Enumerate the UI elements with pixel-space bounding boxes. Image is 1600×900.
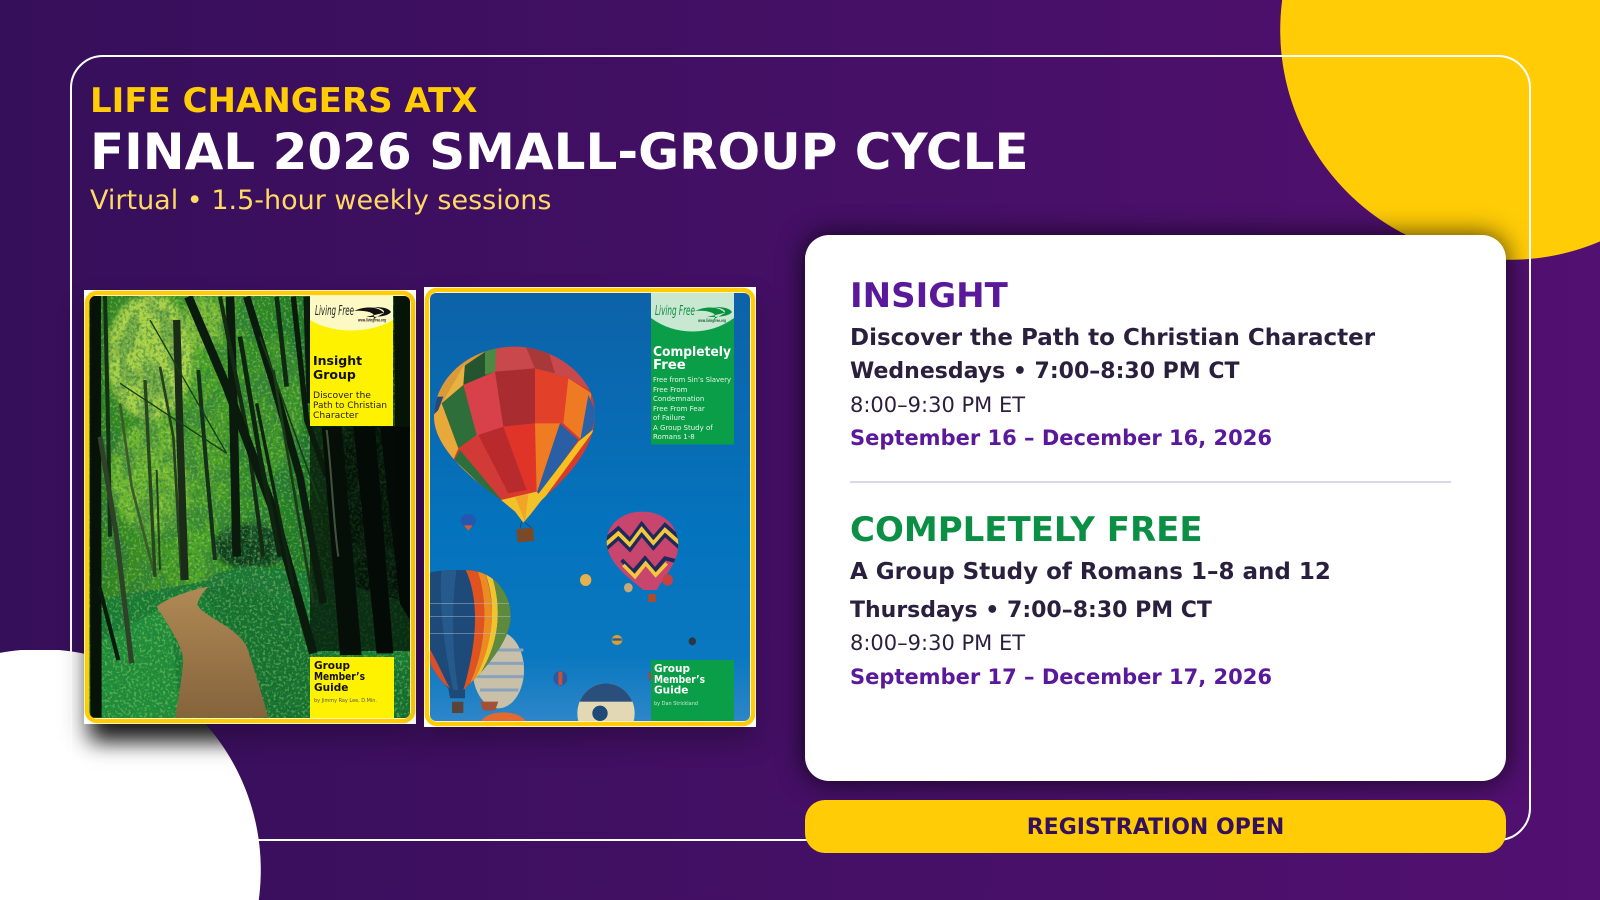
title panel — [310, 296, 393, 426]
section: Insight — [850, 276, 1376, 450]
section: Completely Free — [850, 510, 1331, 689]
tree trunks — [95, 296, 327, 718]
registration button: REGISTRATION OPEN — [1027, 815, 1284, 840]
guide panel: Group — [654, 663, 690, 675]
bottom balloon — [575, 683, 638, 722]
guide panel — [651, 660, 734, 721]
cover subtitle: Romans 1-8 — [653, 433, 695, 441]
header — [90, 81, 1029, 216]
book cover: Insight Group — [84, 290, 416, 724]
guide panel: Guide — [314, 682, 348, 694]
course description: A Group Study of Romans 1–8 and 12 — [850, 558, 1331, 584]
cover title: Insight — [313, 353, 362, 368]
big balloon — [432, 345, 597, 542]
partial balloon — [481, 712, 526, 721]
heading: Completely Free: COMPLETELY FREE — [850, 510, 1203, 550]
striped balloon — [428, 568, 512, 713]
logo: Living Free — [655, 304, 695, 319]
title: FINAL 2026 SMALL-GROUP CYCLE — [90, 123, 1029, 181]
divider — [850, 481, 1451, 483]
decorative circle: yellow top right — [1280, 0, 1600, 260]
dates: September 16 – December 16, 2026 — [850, 426, 1272, 450]
guide panel: Member’s — [654, 674, 705, 686]
guide panel: by Jimmy Ray Lee, D.Min. — [314, 698, 377, 704]
dates: September 17 – December 17, 2026 — [850, 665, 1272, 689]
cover subtitle — [653, 376, 731, 441]
small balloons — [461, 514, 696, 686]
title panel: Free — [653, 358, 686, 373]
cover title: Completely — [653, 345, 731, 360]
balloons photo — [428, 293, 750, 738]
cover subtitle: Discover the — [313, 390, 371, 401]
guide panel — [310, 657, 394, 718]
cover subtitle: Condemnation — [653, 395, 704, 403]
title panel: Path to Christian — [313, 400, 387, 411]
registration button — [805, 800, 1506, 853]
cover subtitle: Free from Sin’s Slavery — [653, 376, 731, 384]
meeting time: Thursdays • 7:00–8:30 PM CT — [850, 598, 1212, 623]
trail — [157, 587, 268, 718]
title panel: Character — [313, 410, 359, 421]
cover subtitle: Free From — [653, 386, 688, 394]
eastern time: 8:00–9:30 PM ET — [850, 393, 1025, 417]
logo: www.livingfree.org — [358, 318, 386, 322]
logo: www.livingfree.org — [698, 318, 726, 323]
guide panel: Group — [314, 660, 350, 672]
guide panel: Guide — [654, 684, 688, 696]
book cover: Completely Free — [424, 287, 756, 727]
title panel: Group — [313, 367, 356, 382]
zigzag balloon — [605, 510, 680, 602]
forest photo — [89, 293, 417, 718]
cover subtitle: Free From Fear — [653, 405, 705, 413]
outline frame — [70, 55, 1531, 841]
meeting time: Wednesdays • 7:00–8:30 PM CT — [850, 359, 1240, 384]
cover subtitle: of Failure — [653, 414, 685, 422]
heading: organisation: LIFE CHANGERS ATX — [90, 81, 478, 121]
subtitle: Virtual • 1.5-hour weekly sessions — [90, 184, 551, 216]
title panel — [651, 293, 734, 444]
heading: Insight: INSIGHT — [850, 276, 1008, 316]
guide panel: by Dan Strickland — [654, 701, 698, 707]
cover subtitle: A Group Study of — [653, 424, 713, 432]
tan checked balloon — [473, 632, 524, 711]
decorative circle: white bottom left — [0, 650, 261, 900]
eastern time: 8:00–9:30 PM ET — [850, 631, 1025, 655]
guide panel: Member’s — [314, 671, 365, 683]
course description: Discover the Path to Christian Character — [850, 324, 1375, 350]
book shadow on white circle — [73, 652, 230, 759]
forest floor — [89, 567, 410, 718]
logo: Living Free — [315, 304, 354, 319]
panel: schedule card — [805, 235, 1506, 781]
